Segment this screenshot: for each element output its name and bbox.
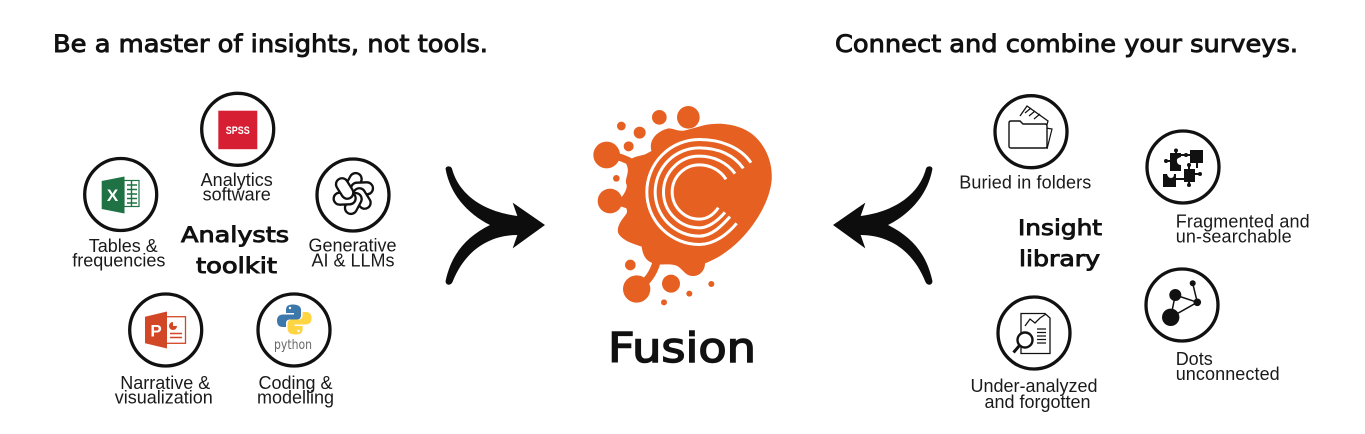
heading: right: Connect and combine your surveys. [835, 30, 1298, 58]
tool: Excel tables and frequencies: X [107, 186, 119, 205]
logo: Fusion orange splash [593, 106, 772, 305]
toolkit title: toolkit [196, 254, 277, 278]
tool: PowerPoint narrative and visualization: P [150, 322, 162, 340]
tool: SPSS analytics software: Analytics [201, 170, 273, 190]
item: under-analyzed and forgotten: and forgotten [984, 392, 1091, 412]
item: buried in folders [959, 96, 1091, 192]
tool: PowerPoint narrative and visualization [115, 294, 213, 408]
item: under-analyzed and forgotten [970, 297, 1098, 412]
toolkit title: Analysts [181, 223, 289, 247]
library title [1018, 216, 1102, 271]
tool: Python coding and modelling: modelling [257, 388, 334, 408]
tool: SPSS analytics software: software [203, 184, 271, 204]
tool: Excel tables and frequencies [72, 158, 165, 270]
tool: generative AI knot [308, 159, 397, 270]
item: fragmented and un-searchable: un-searchable [1176, 226, 1292, 246]
tool: Excel tables and frequencies: frequencies [72, 250, 165, 270]
item: dots unconnected: unconnected [1176, 364, 1280, 384]
tool: Python coding and modelling: python [274, 338, 312, 353]
tool: PowerPoint narrative and visualization: Narrative & [120, 373, 210, 393]
item: buried in folders: Buried in folders [959, 172, 1091, 192]
panel: insight library [959, 96, 1310, 412]
item: under-analyzed and forgotten: Under-analyzed [970, 376, 1098, 396]
item: dots unconnected [1146, 269, 1280, 384]
tool: Excel tables and frequencies: Tables & [89, 236, 158, 256]
tool: SPSS analytics software [201, 93, 274, 204]
tool: PowerPoint narrative and visualization: visualization [115, 388, 213, 408]
tool: generative AI knot: Generative [308, 236, 397, 256]
item: fragmented and un-searchable [1147, 131, 1310, 246]
heading: left: Be a master of insights, not tools. [53, 30, 488, 58]
library title: Insight [1018, 216, 1102, 240]
item: fragmented and un-searchable: Fragmented and [1176, 212, 1310, 232]
arrow: right merging into logo [833, 166, 932, 285]
tool: generative AI knot: AI & LLMs [311, 250, 395, 270]
toolkit title [181, 223, 289, 278]
library title: library [1019, 247, 1100, 271]
tool: SPSS analytics software: SPSS [226, 125, 250, 137]
tool: Python coding and modelling [257, 294, 334, 408]
logo wordmark: Fusion [608, 324, 756, 372]
arrow: left merging into logo [446, 166, 545, 285]
tool: Python coding and modelling: Coding & [258, 373, 333, 393]
panel: analysts toolkit [72, 93, 397, 408]
item: dots unconnected: Dots [1176, 349, 1213, 369]
